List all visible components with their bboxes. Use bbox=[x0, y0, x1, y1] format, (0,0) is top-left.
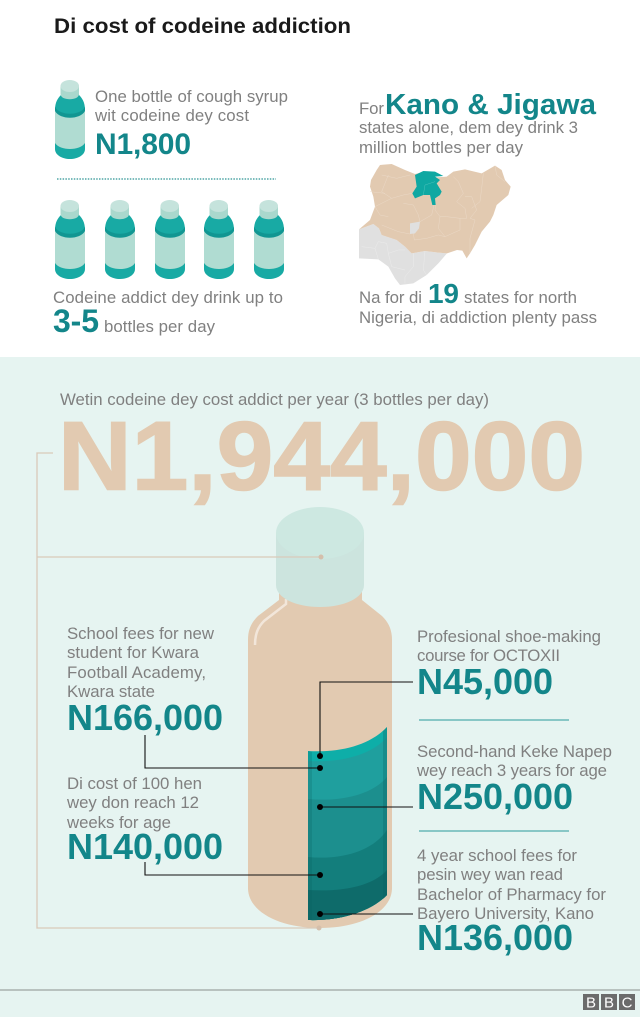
text: one bottle cost: One bottle of cough syrup bbox=[95, 87, 288, 106]
cost: hens: wey don reach 12 bbox=[66, 793, 199, 812]
connector: total cost to bottle bbox=[37, 453, 324, 930]
BBC logo bbox=[583, 994, 635, 1012]
BBC logo: B bbox=[604, 994, 614, 1012]
text: 19 states bbox=[359, 278, 597, 327]
BBC logo: B bbox=[586, 994, 596, 1012]
cost: school fees: N166,000 bbox=[67, 697, 223, 738]
cost: shoe-making course bbox=[417, 627, 601, 702]
text: bottles per day: bottles per day bbox=[104, 317, 216, 336]
title: Di cost of codeine addiction bbox=[54, 15, 351, 38]
bottle highlight bbox=[255, 599, 286, 645]
big number: N1,944,000 bbox=[58, 402, 585, 510]
cost: keke napep bbox=[416, 742, 612, 817]
map: northern states bbox=[359, 164, 511, 258]
cost: pharmacy degree: N136,000 bbox=[417, 917, 573, 958]
cost: school fees: student for Kwara bbox=[67, 643, 200, 662]
large bottle bbox=[248, 507, 392, 928]
text: one bottle cost: wit codeine dey cost bbox=[94, 106, 249, 125]
map: southern states bbox=[359, 224, 447, 285]
cost: pharmacy degree: 4 year school fees for bbox=[417, 846, 577, 865]
text: bottles per day bbox=[53, 288, 283, 339]
text: 19 states: Na for di bbox=[359, 288, 422, 307]
cost: pharmacy degree: pesin wey wan read bbox=[417, 865, 563, 884]
text: Kano and Jigawa: million bottles per day bbox=[359, 138, 524, 157]
text: 19 states: Nigeria, di addiction plenty pass bbox=[359, 308, 597, 327]
text: Kano and Jigawa bbox=[359, 89, 597, 157]
map: southern borders bbox=[362, 242, 427, 283]
bottle cap bbox=[276, 533, 364, 607]
cost: keke napep: wey reach 3 years for age bbox=[416, 761, 607, 780]
cost: school fees: Football Academy, bbox=[67, 663, 206, 682]
icon: single bottle bbox=[55, 80, 85, 159]
text: 19 states: 19 bbox=[428, 278, 459, 309]
text: yearly cost label: Wetin codeine dey cost addict per year (3 bottles per day) bbox=[60, 390, 489, 409]
cost: school fees bbox=[67, 624, 223, 738]
map: state borders bbox=[370, 166, 505, 253]
text: Kano and Jigawa: For bbox=[359, 99, 384, 118]
cost: shoe-making course: course for OCTOXII bbox=[417, 646, 560, 665]
text: Kano and Jigawa: Kano & Jigawa bbox=[385, 89, 597, 121]
cost: pharmacy degree: Bachelor of Pharmacy for bbox=[417, 885, 606, 904]
cost: shoe-making course: Profesional shoe-making bbox=[417, 627, 601, 646]
cost: hens bbox=[66, 774, 223, 867]
lower panel background bbox=[0, 357, 640, 1017]
cost: keke napep: N250,000 bbox=[417, 776, 573, 817]
map: Kano and Jigawa bbox=[412, 171, 443, 205]
bottle label: teal bands bbox=[308, 727, 387, 920]
cost: hens: N140,000 bbox=[67, 826, 223, 867]
cost: school fees: Kwara state bbox=[67, 682, 155, 701]
map: Nigeria bbox=[359, 164, 511, 285]
text: bottles per day: Codeine addict dey drink up to bbox=[53, 288, 283, 307]
cost: pharmacy degree bbox=[417, 846, 606, 958]
connectors: cost labels to bands bbox=[145, 682, 413, 917]
text: Kano and Jigawa: states alone, dem dey drink 3 bbox=[359, 118, 578, 137]
icon: row of five bottles bbox=[55, 200, 284, 279]
text: bottles per day: 3-5 bbox=[53, 303, 99, 339]
bottle body bbox=[248, 590, 392, 928]
map: Abuja bbox=[410, 222, 420, 234]
cost: shoe-making course: N45,000 bbox=[417, 661, 553, 702]
cost: keke napep: Second-hand Keke Napep bbox=[417, 742, 612, 761]
cost: hens: weeks for age bbox=[66, 813, 171, 832]
text: one bottle cost: N1,800 bbox=[95, 128, 191, 161]
cost: school fees: School fees for new bbox=[67, 624, 215, 643]
cost: pharmacy degree: Bayero University, Kano bbox=[417, 904, 594, 923]
text: 19 states: states for north bbox=[464, 288, 577, 307]
BBC logo: C bbox=[622, 994, 633, 1012]
cost: hens: Di cost of 100 hen bbox=[67, 774, 202, 793]
text: one bottle cost bbox=[94, 87, 288, 161]
